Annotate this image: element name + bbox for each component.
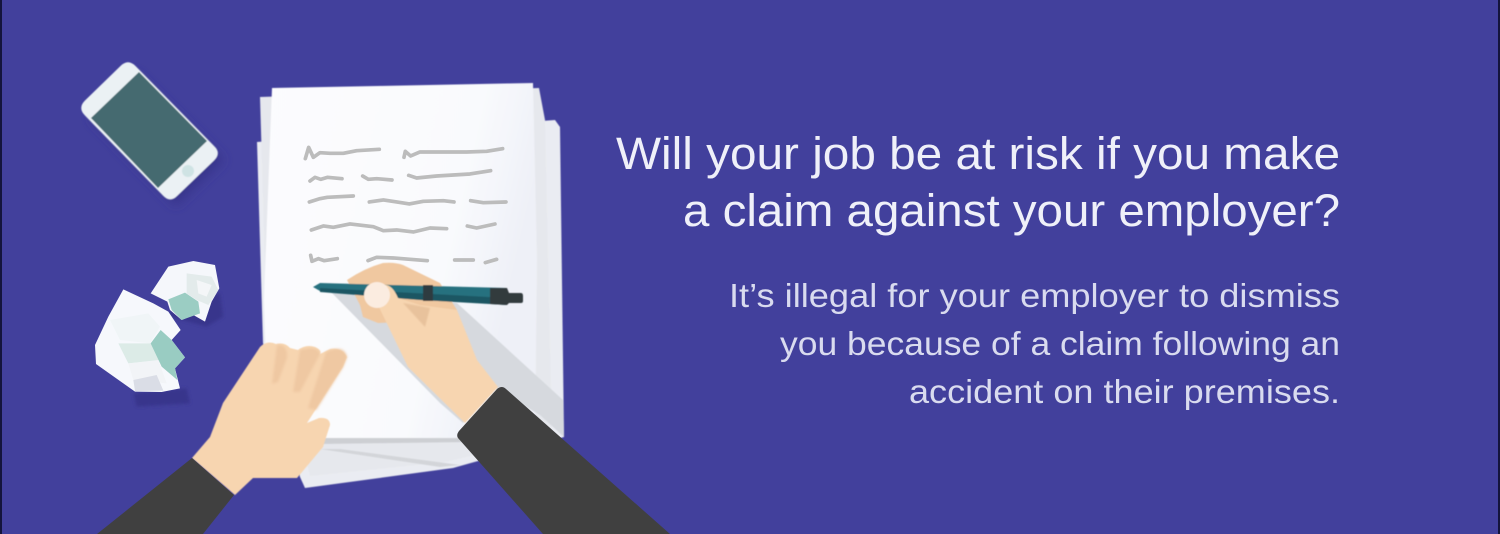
left hand xyxy=(192,343,347,495)
middle sheet xyxy=(260,88,552,476)
title: Will your job be at risk if you make xyxy=(616,128,1340,179)
title xyxy=(616,128,1340,236)
right sleeve xyxy=(457,387,670,534)
icon: crumpled paper large xyxy=(95,289,190,407)
palm behind pen xyxy=(347,263,457,323)
left sleeve xyxy=(97,458,234,534)
page edges xyxy=(320,438,470,444)
body text: It’s illegal for your employer to dismiss xyxy=(729,277,1340,314)
paper stack xyxy=(257,83,564,488)
icon: smartphone xyxy=(81,62,224,206)
right hand holding pen xyxy=(313,263,523,423)
cast shadow of hand xyxy=(330,291,564,437)
thumb tip xyxy=(364,282,390,308)
hand front xyxy=(376,285,498,423)
pen xyxy=(313,283,523,305)
body text: accident on their premises. xyxy=(909,373,1340,410)
body text xyxy=(729,277,1340,410)
icon: crumpled paper small xyxy=(151,261,223,327)
title: a claim against your employer? xyxy=(683,185,1340,236)
bottom sheet xyxy=(257,120,564,488)
handwriting scribbles xyxy=(305,147,506,263)
top sheet xyxy=(264,83,537,438)
body text: you because of a claim following an xyxy=(780,325,1340,362)
